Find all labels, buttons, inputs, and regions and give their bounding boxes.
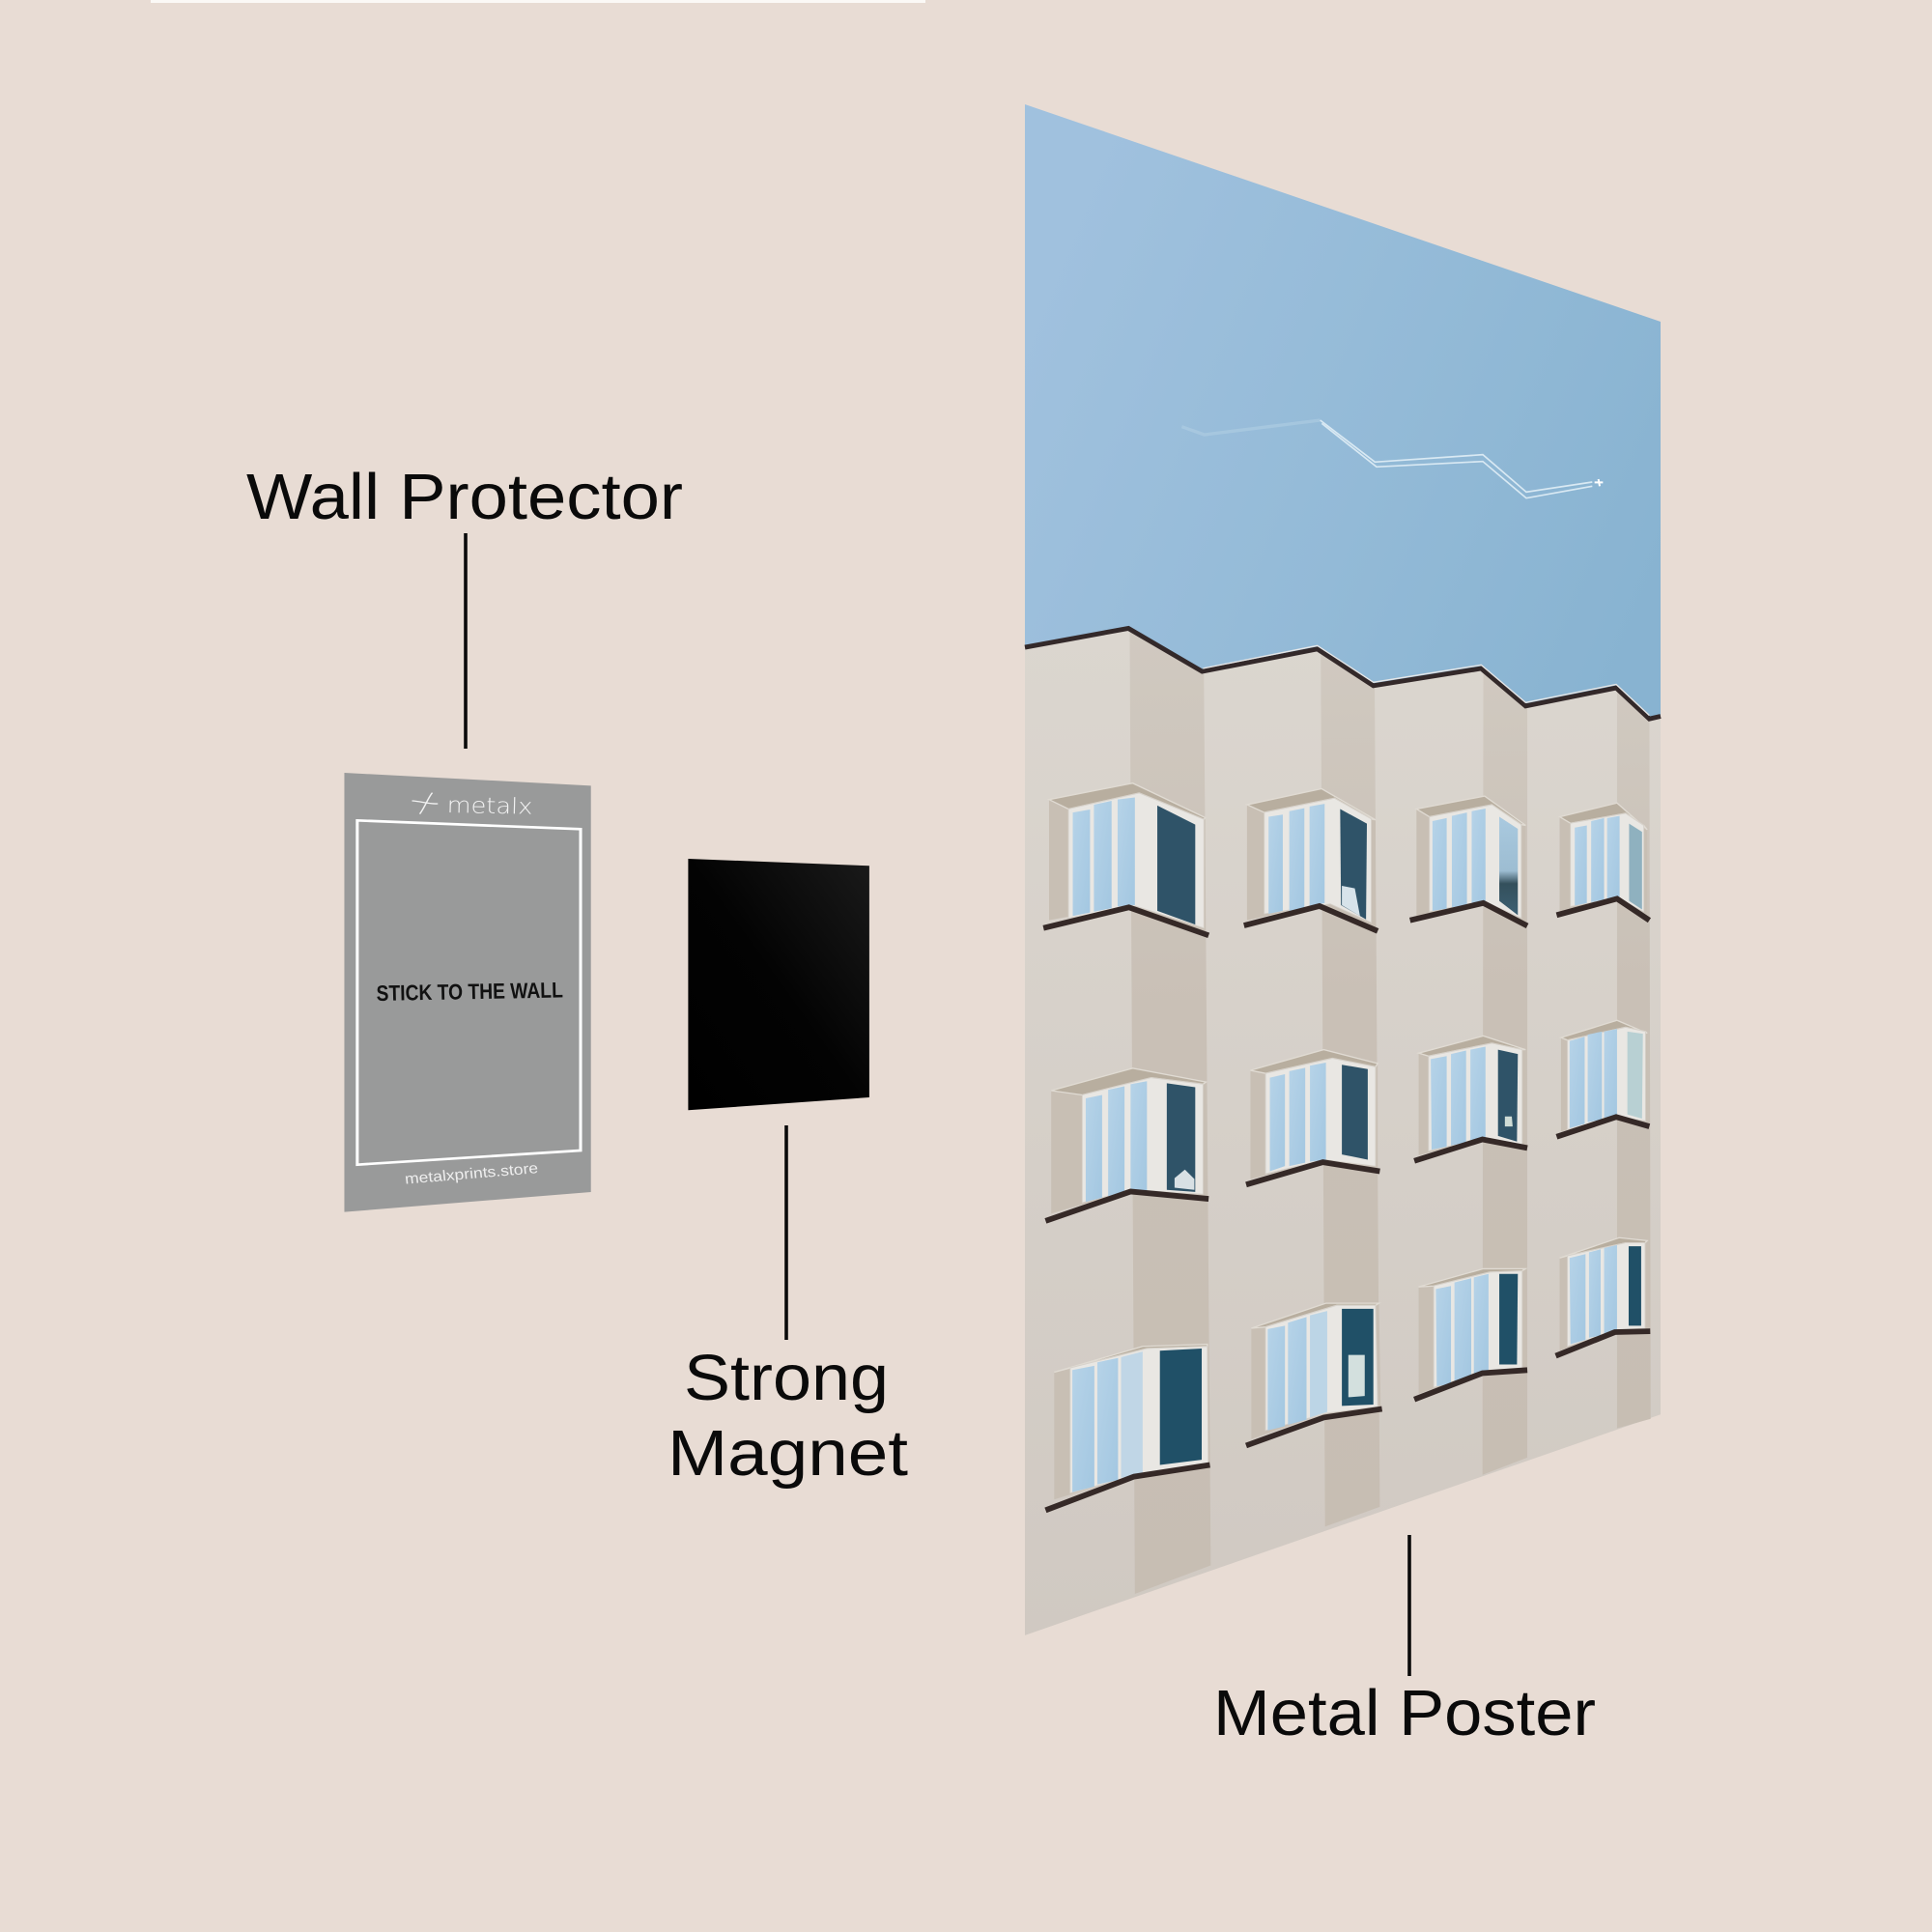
sky <box>1025 104 1661 719</box>
window row 3 column 3 <box>1414 1268 1527 1400</box>
sheet <box>344 773 591 1212</box>
window row 1 column 4 <box>1556 803 1649 921</box>
window row 2 column 3 <box>1414 1036 1527 1161</box>
metalx logo mark <box>412 793 438 814</box>
roof cornice <box>1025 628 1661 719</box>
window row 1 column 2 <box>1244 789 1378 931</box>
window row 1 column 1 <box>1043 783 1208 935</box>
label: strong magnet: Magnet <box>668 1417 908 1490</box>
stick to the wall text: STICK TO THE WALL <box>376 979 563 1007</box>
building facade <box>1025 628 1661 1635</box>
metal poster <box>1025 104 1661 1635</box>
top white strip <box>151 0 925 3</box>
leader line: wall protector <box>464 533 468 749</box>
window row 1 column 3 <box>1410 796 1527 925</box>
aeroplane and contrails <box>1181 420 1603 498</box>
white border frame <box>357 820 581 1165</box>
label: wall protector: Wall Protector <box>246 461 683 533</box>
website text: metalxprints.store <box>404 1160 539 1187</box>
strong magnet sheet <box>688 859 869 1110</box>
leader line: strong magnet <box>784 1125 788 1340</box>
window row 2 column 1 <box>1045 1068 1208 1221</box>
window row 3 column 1 <box>1045 1345 1210 1510</box>
label: strong magnet: Strong <box>684 1342 889 1414</box>
metalx wordmark: metalx <box>446 792 533 819</box>
label: metal poster: Metal Poster <box>1213 1677 1596 1749</box>
building side walls <box>1129 629 1651 1594</box>
window row 3 column 4 <box>1556 1237 1650 1356</box>
wall protector sheet <box>344 773 591 1212</box>
window row 2 column 2 <box>1246 1050 1379 1184</box>
leader line: metal poster <box>1407 1535 1411 1676</box>
window row 3 column 2 <box>1246 1303 1382 1445</box>
window row 2 column 4 <box>1556 1020 1649 1137</box>
